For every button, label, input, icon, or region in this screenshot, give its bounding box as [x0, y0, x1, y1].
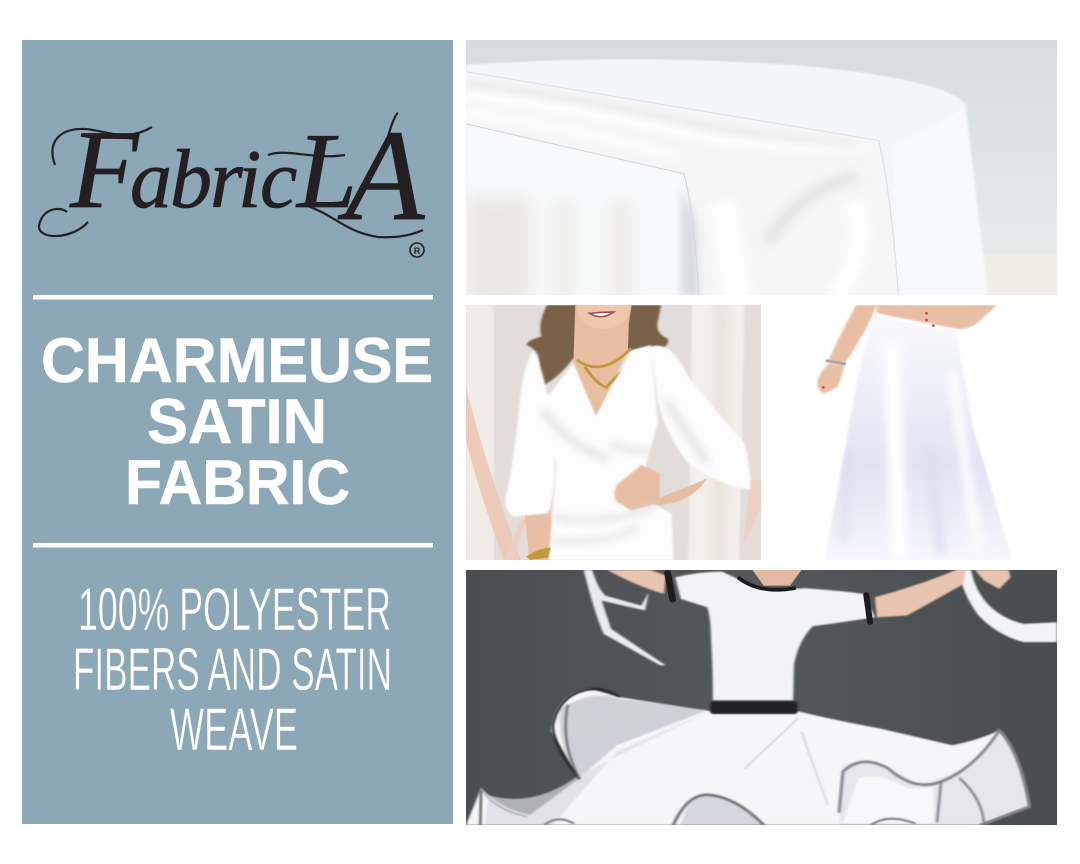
skirt: [824, 312, 1013, 560]
photo: satin table runner: [466, 40, 1057, 295]
logo: FabricLA: c: [260, 133, 297, 226]
arms: [607, 570, 1011, 617]
logo: FabricLA: F: [69, 108, 140, 232]
description text: WEAVE: [170, 696, 298, 763]
skin: [524, 305, 707, 560]
logo: FabricLA: R: [414, 246, 421, 256]
panel: brand and title: [22, 40, 453, 824]
description text: [73, 576, 392, 763]
hair: [526, 305, 668, 387]
divider top: [33, 295, 433, 300]
logo: FabricLA: r: [210, 133, 243, 226]
photo: white satin skirt: [816, 305, 1010, 560]
ribbons: [584, 570, 1057, 665]
logo: FabricLA: b: [170, 133, 212, 226]
logo: FabricLA: A: [337, 104, 425, 248]
heading: FABRIC: [125, 448, 350, 518]
logo: FabricLA: i: [238, 133, 261, 226]
divider bottom: [33, 543, 433, 548]
description text: FIBERS AND SATIN: [73, 636, 392, 703]
logo: FabricLA: [39, 104, 425, 257]
bodice: [675, 572, 875, 700]
lace belt: [710, 701, 798, 714]
dress: [505, 345, 750, 560]
description text: 100% POLYESTER: [78, 576, 391, 643]
photo: dancer in swirling white dress: [466, 570, 1057, 825]
skirt: [466, 689, 1029, 825]
heading: [41, 326, 433, 518]
lace trim: [668, 573, 870, 622]
runner: [466, 72, 899, 296]
heading: CHARMEUSE: [41, 326, 433, 396]
heading: SATIN: [147, 387, 327, 457]
logo: FabricLA: a: [130, 133, 172, 226]
photo: woman in satin wrap dress: [466, 305, 761, 560]
logo: FabricLA: L: [295, 112, 357, 231]
necklace: [577, 348, 631, 387]
